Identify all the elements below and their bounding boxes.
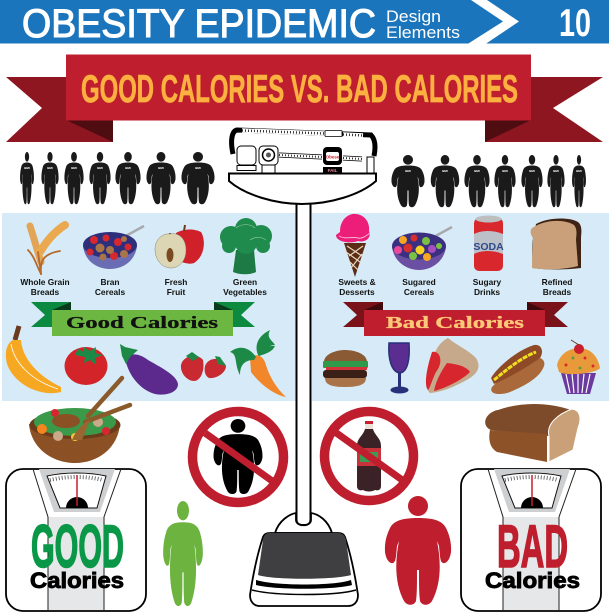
row of figures: increasing BMI: BMI — [158, 166, 164, 170]
icon: sugared cereal bowl — [392, 227, 452, 270]
icon: soda can — [473, 216, 504, 271]
row of figures: decreasing BMI: BMI — [442, 169, 448, 173]
obese marker: FAIL — [328, 168, 338, 173]
row of figures: decreasing BMI: BMI — [576, 169, 582, 173]
icon: burger — [323, 350, 368, 387]
icon: bread slice — [531, 218, 581, 270]
lower ruler — [279, 155, 362, 159]
header bar — [0, 0, 609, 46]
bad food labels: Desserts — [339, 287, 375, 297]
icon: broccoli — [220, 218, 272, 274]
left scale: good calories — [6, 469, 146, 611]
row of figures: decreasing BMI: BMI — [553, 169, 559, 173]
row of figures: increasing BMI: BMI — [71, 166, 77, 170]
scale: pole and head — [229, 130, 376, 606]
good food labels: Fruit — [167, 287, 186, 297]
good calories ribbon — [31, 302, 255, 336]
good food labels: Cereals — [95, 287, 125, 297]
row of figures: increasing BMI: BMI — [97, 166, 103, 170]
icon: t-bone steak — [426, 338, 478, 393]
good food labels: Bran — [100, 277, 120, 287]
title ribbon — [6, 54, 603, 142]
row of figures: increasing BMI: BMI — [195, 166, 201, 170]
wooden servers — [85, 378, 130, 422]
bad food labels: Refined — [542, 277, 572, 287]
icon: strawberries — [181, 352, 226, 381]
icon: wheat — [28, 225, 65, 274]
header title: OBESITY EPIDEMIC — [22, 2, 376, 46]
obese marker — [323, 147, 342, 173]
upper ruler — [242, 130, 363, 136]
bad food labels: Cereals — [404, 287, 434, 297]
right scale: bad calories — [461, 469, 601, 611]
obese marker: Obese — [326, 154, 340, 160]
row of figures: decreasing BMI — [391, 155, 586, 207]
good food labels: Breads — [31, 287, 60, 297]
icon: loaf of bread — [485, 404, 580, 462]
panel: bad calories background — [312, 213, 609, 401]
icon: wine glass — [389, 343, 409, 394]
icon: fresh fruit apple — [155, 225, 204, 268]
can label: SODA — [473, 241, 504, 253]
no soda sign — [324, 412, 414, 500]
row of figures: decreasing BMI: BMI — [529, 169, 535, 173]
green healthy figure — [163, 501, 203, 606]
bad food labels: Sweets & — [338, 277, 376, 287]
icon: banana — [6, 326, 61, 393]
bad calories ribbon — [343, 302, 568, 336]
good food labels: Vegetables — [223, 287, 267, 297]
good word: GOOD — [31, 513, 124, 580]
good food labels — [20, 277, 267, 297]
calories word: Calories — [485, 568, 580, 593]
header subtitle: Design — [386, 7, 441, 26]
weights and poise — [237, 146, 278, 173]
row of figures: decreasing BMI: BMI — [502, 169, 508, 173]
scale head dish — [229, 174, 376, 204]
row of figures: increasing BMI: BMI — [47, 166, 53, 170]
bad food labels: Drinks — [474, 287, 500, 297]
row of figures: decreasing BMI: BMI — [474, 169, 480, 173]
icon: tomato — [64, 347, 108, 385]
header subtitle — [386, 7, 460, 42]
icon: eggplant — [120, 344, 178, 395]
bad food labels: Breads — [543, 287, 572, 297]
scale arm frame — [232, 130, 375, 156]
row of figures: increasing BMI — [20, 152, 215, 204]
header subtitle: Elements — [386, 23, 460, 42]
bad food labels — [338, 277, 572, 297]
icon: carrot — [230, 330, 286, 397]
no obesity sign — [192, 412, 284, 502]
page number: 10 — [559, 2, 591, 45]
panel: good calories background — [2, 213, 296, 401]
row of figures: decreasing BMI: BMI — [405, 169, 411, 173]
calories word: Calories — [30, 568, 124, 593]
soda bottle — [357, 421, 381, 492]
icon: ice cream cone — [336, 214, 370, 277]
icon: hot dog — [491, 345, 544, 394]
row of figures: increasing BMI: BMI — [24, 166, 30, 170]
icon: bran cereal bowl — [83, 226, 144, 269]
scale base — [250, 513, 358, 606]
icon: cupcake — [557, 340, 600, 394]
chevron arrow — [466, 0, 519, 45]
ribbon label: Bad Calories — [386, 313, 525, 332]
red obese figure — [385, 496, 451, 605]
bad food labels: Sugared — [402, 277, 436, 287]
good food labels: Green — [233, 277, 257, 287]
row of figures: increasing BMI: BMI — [125, 166, 131, 170]
icon: salad bowl — [29, 378, 130, 463]
bad food labels: Sugary — [473, 277, 502, 287]
ribbon label: Good Calories — [66, 313, 219, 332]
good food labels: Whole Grain — [20, 277, 70, 287]
good food labels: Fresh — [165, 277, 187, 287]
